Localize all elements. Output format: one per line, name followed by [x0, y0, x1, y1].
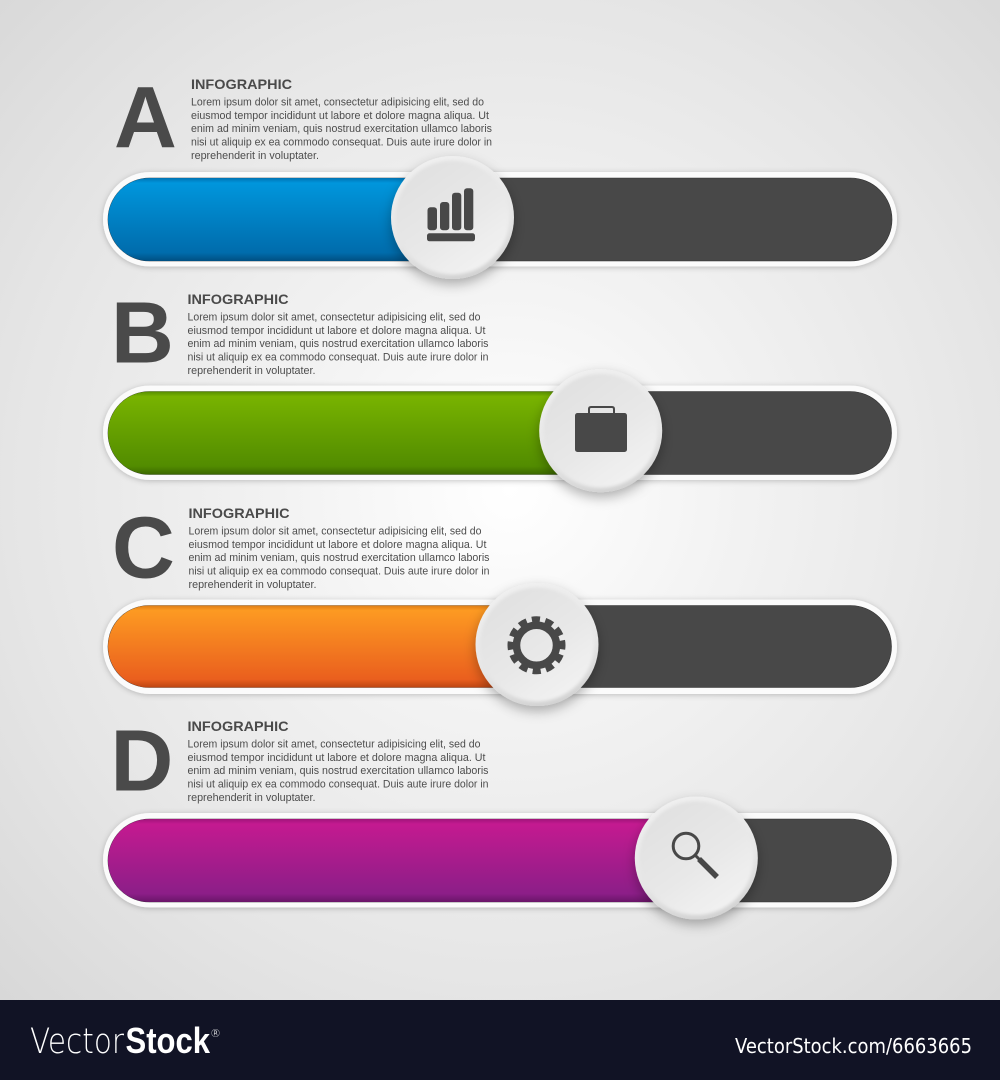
icon: gear: [511, 620, 562, 671]
text block D: [188, 718, 489, 804]
text block C: eiusmod tempor incididunt ut labore et dolore magna aliqua. Ut: [188, 539, 486, 551]
knob C: [476, 583, 598, 706]
footer url: VectorStock.com/6663665: [735, 1034, 972, 1058]
text block B: INFOGRAPHIC: [188, 291, 288, 307]
text block A: reprehenderit in voluptater.: [191, 150, 319, 162]
text block B: eiusmod tempor incididunt ut labore et dolore magna aliqua. Ut: [188, 325, 486, 337]
letter A: A: [114, 70, 177, 166]
letter C: C: [112, 500, 175, 596]
text block B: nisi ut aliquip ex ea commodo consequat. Duis aute irure dolor in: [188, 352, 488, 364]
panel: row C: [103, 500, 897, 706]
icon: bar chart: [427, 188, 475, 241]
knob A: [391, 156, 514, 279]
text block C: enim ad minim veniam, quis nostrud exercitation ullamco laboris: [188, 552, 490, 564]
knob D: [635, 796, 758, 920]
text block C: reprehenderit in voluptater.: [188, 579, 316, 591]
text block A: Lorem ipsum dolor sit amet, consectetur adipisicing elit, sed do: [191, 96, 484, 108]
icon: briefcase: [575, 407, 627, 452]
text block C: Lorem ipsum dolor sit amet, consectetur adipisicing elit, sed do: [188, 526, 482, 538]
text block A: enim ad minim veniam, quis nostrud exercitation ullamco laboris: [191, 123, 492, 135]
text block A: [191, 76, 492, 162]
text block A: INFOGRAPHIC: [191, 76, 292, 92]
icon: magnifier: [673, 833, 717, 877]
slider track D: [103, 813, 897, 908]
text block D: eiusmod tempor incididunt ut labore et dolore magna aliqua. Ut: [188, 752, 486, 764]
text block B: [188, 291, 489, 377]
text block D: Lorem ipsum dolor sit amet, consectetur adipisicing elit, sed do: [188, 738, 480, 750]
text block A: nisi ut aliquip ex ea commodo consequat. Duis aute irure dolor in: [191, 136, 492, 148]
panel: row A: [103, 70, 897, 279]
knob B: [539, 369, 662, 492]
text block B: Lorem ipsum dolor sit amet, consectetur adipisicing elit, sed do: [188, 312, 480, 324]
text block C: INFOGRAPHIC: [188, 505, 290, 521]
text block C: nisi ut aliquip ex ea commodo consequat. Duis aute irure dolor in: [188, 566, 490, 578]
text block A: eiusmod tempor incididunt ut labore et dolore magna aliqua. Ut: [191, 110, 489, 122]
text block D: enim ad minim veniam, quis nostrud exercitation ullamco laboris: [188, 765, 489, 777]
text block D: reprehenderit in voluptater.: [188, 792, 316, 804]
slider track A: [103, 172, 897, 266]
text block D: INFOGRAPHIC: [188, 718, 288, 734]
panel: row D: [103, 712, 897, 920]
text block B: enim ad minim veniam, quis nostrud exercitation ullamco laboris: [188, 338, 489, 350]
text block B: reprehenderit in voluptater.: [188, 365, 316, 377]
footer logo: ®: [210, 1027, 221, 1040]
slider track C: [103, 600, 897, 694]
footer logo: [30, 1020, 221, 1062]
slider track B: [103, 386, 897, 480]
text block C: [188, 505, 490, 591]
footer bar: [0, 1000, 1000, 1080]
footer logo: Stock: [126, 1020, 211, 1061]
letter D: D: [110, 712, 173, 810]
text block D: nisi ut aliquip ex ea commodo consequat. Duis aute irure dolor in: [188, 778, 488, 790]
letter B: B: [111, 284, 174, 382]
panel: row B: [103, 284, 897, 492]
footer logo: Vector: [30, 1022, 125, 1062]
